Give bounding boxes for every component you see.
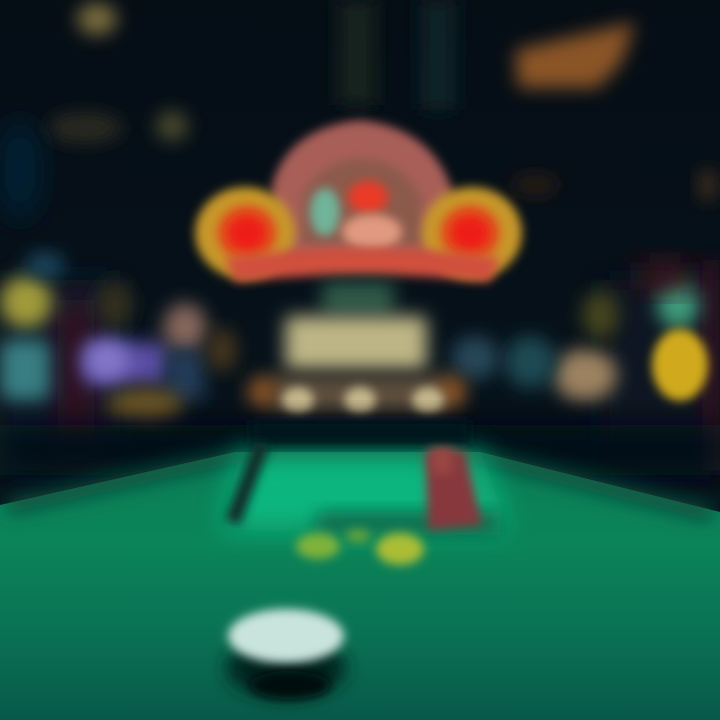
dark band behind table [0,425,720,475]
foreground poker chip [226,609,346,699]
ceiling lights [0,0,717,220]
slot machines, left [0,253,237,470]
table shadow and legs [225,420,500,535]
green table felt [0,452,720,720]
casino marquee sign [195,120,522,282]
yellow chips [296,529,424,565]
central slot machine [248,282,466,413]
slot machines, right [451,260,720,470]
red card stack [425,448,482,530]
